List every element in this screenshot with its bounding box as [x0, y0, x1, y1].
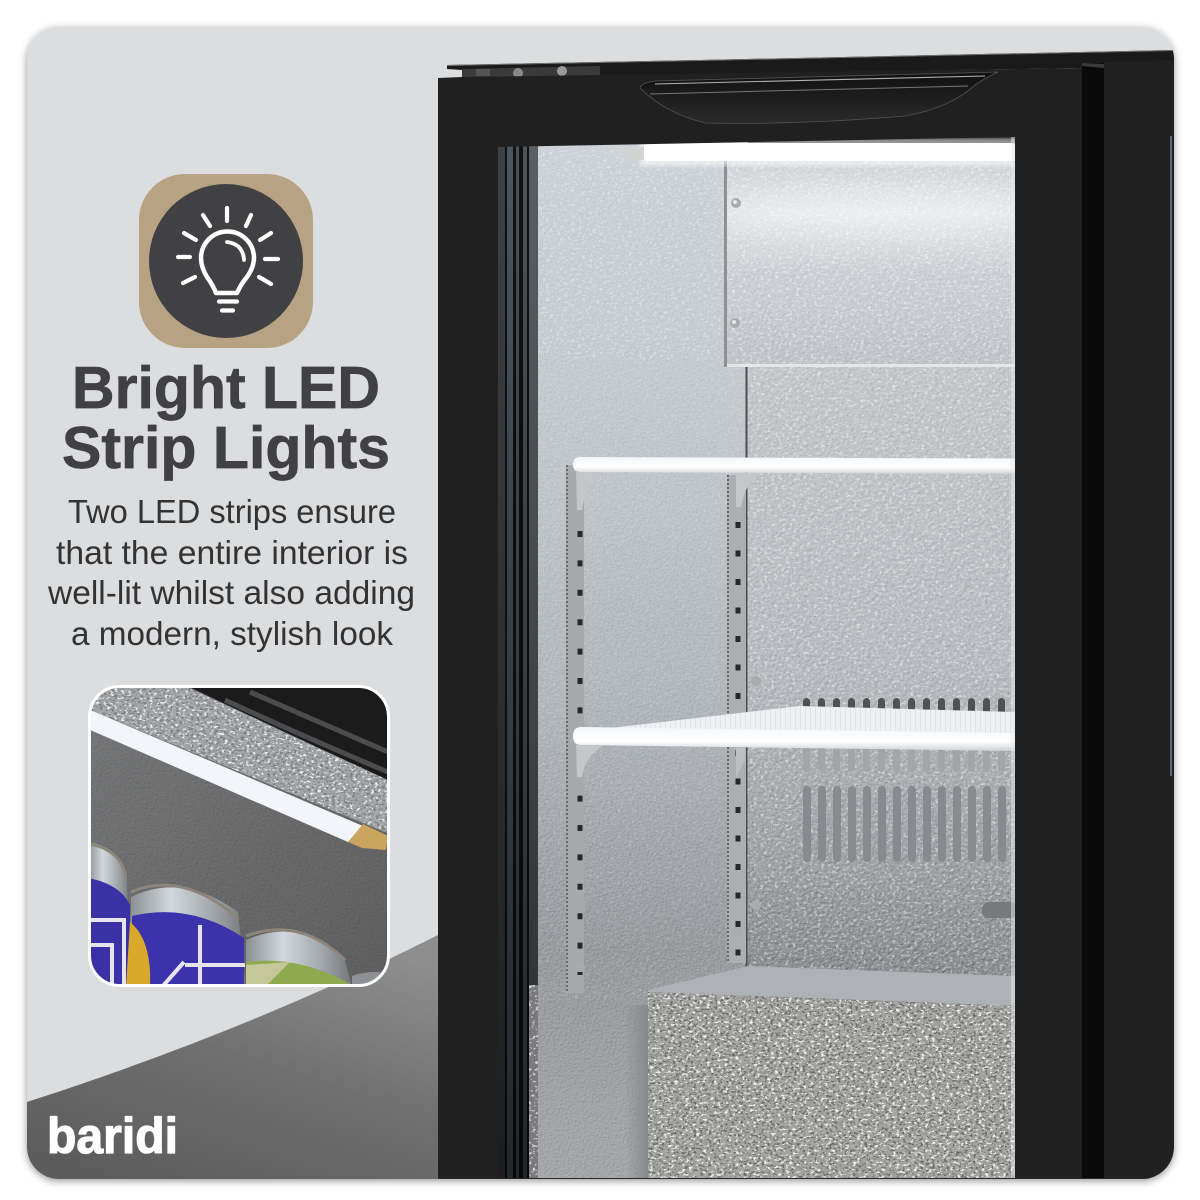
- compartment front panel: [648, 992, 1015, 1180]
- bottom-left grey wedge: [27, 935, 438, 1180]
- heading: Strip Lights: [62, 415, 390, 481]
- bulb glyph: [178, 208, 278, 310]
- shelf bracket: [576, 745, 603, 777]
- screw: [731, 198, 741, 208]
- shelf bracket: [576, 472, 598, 510]
- logo: baridi: baridi: [47, 1108, 178, 1164]
- textured metal strip: [88, 685, 390, 845]
- heading: Bright LED: [72, 355, 380, 421]
- can 4: [352, 972, 388, 987]
- icon: light bulb badge: [139, 174, 313, 348]
- LED tube: [88, 709, 363, 842]
- can 2: [126, 885, 246, 987]
- door handle: [640, 72, 998, 123]
- lid hardware and screws: [462, 66, 600, 78]
- black door top: [185, 685, 390, 782]
- wall corner line: [746, 367, 748, 967]
- horizontal wall slot: [982, 902, 1018, 918]
- back wall: [747, 360, 1015, 980]
- icon background: [139, 174, 313, 348]
- fridge door frame: [438, 68, 1082, 1180]
- door seal detail: [225, 692, 388, 772]
- compartment top ledge: [648, 966, 1015, 1006]
- vent slots below shelf: [803, 748, 1005, 772]
- wall screws: [751, 676, 761, 910]
- shelf rail left: [566, 465, 584, 993]
- neighbouring door: [1082, 60, 1174, 1180]
- icon circle: [149, 184, 303, 338]
- dark gap below fridge body at bottom edge: [438, 1178, 1150, 1179]
- description text: [47, 493, 415, 652]
- fridge window interior: [498, 130, 1030, 1190]
- can 1: [88, 843, 130, 990]
- description text: that the entire interior is: [56, 534, 408, 571]
- description text: a modern, stylish look: [71, 615, 394, 652]
- left side wall: [538, 140, 748, 1180]
- upper wire shelf: [573, 457, 1015, 510]
- product photo: glass door fridge: [438, 50, 1174, 1190]
- upper vent slots: [803, 698, 1005, 712]
- heading: [62, 355, 390, 481]
- upper back plate: [724, 160, 1030, 367]
- inset photo: LED strip close-up: [88, 685, 390, 990]
- description text: Two LED strips ensure: [68, 493, 396, 530]
- shelf rail right: [727, 475, 746, 963]
- front panel sparkle: [648, 992, 1015, 1180]
- door glass edge strips: [498, 130, 538, 1190]
- lower compartment: [625, 966, 1015, 1180]
- reflection by panel edge: [630, 1005, 648, 1178]
- inset border: [90, 686, 388, 986]
- right window glow edge: [1011, 137, 1015, 1180]
- top LED strip: [618, 138, 1016, 166]
- shelf bracket: [736, 748, 745, 778]
- lower wire shelf: [573, 706, 1015, 778]
- fridge top lid: [447, 50, 1174, 75]
- description text: well-lit whilst also adding: [47, 574, 415, 611]
- lid highlight: [447, 50, 1174, 66]
- shelf bracket: [736, 473, 762, 507]
- screw: [730, 318, 740, 328]
- interior ceiling: [88, 685, 390, 987]
- lower vent slots: [803, 786, 1006, 862]
- can 3: [246, 930, 352, 987]
- LED end cap: [348, 824, 388, 850]
